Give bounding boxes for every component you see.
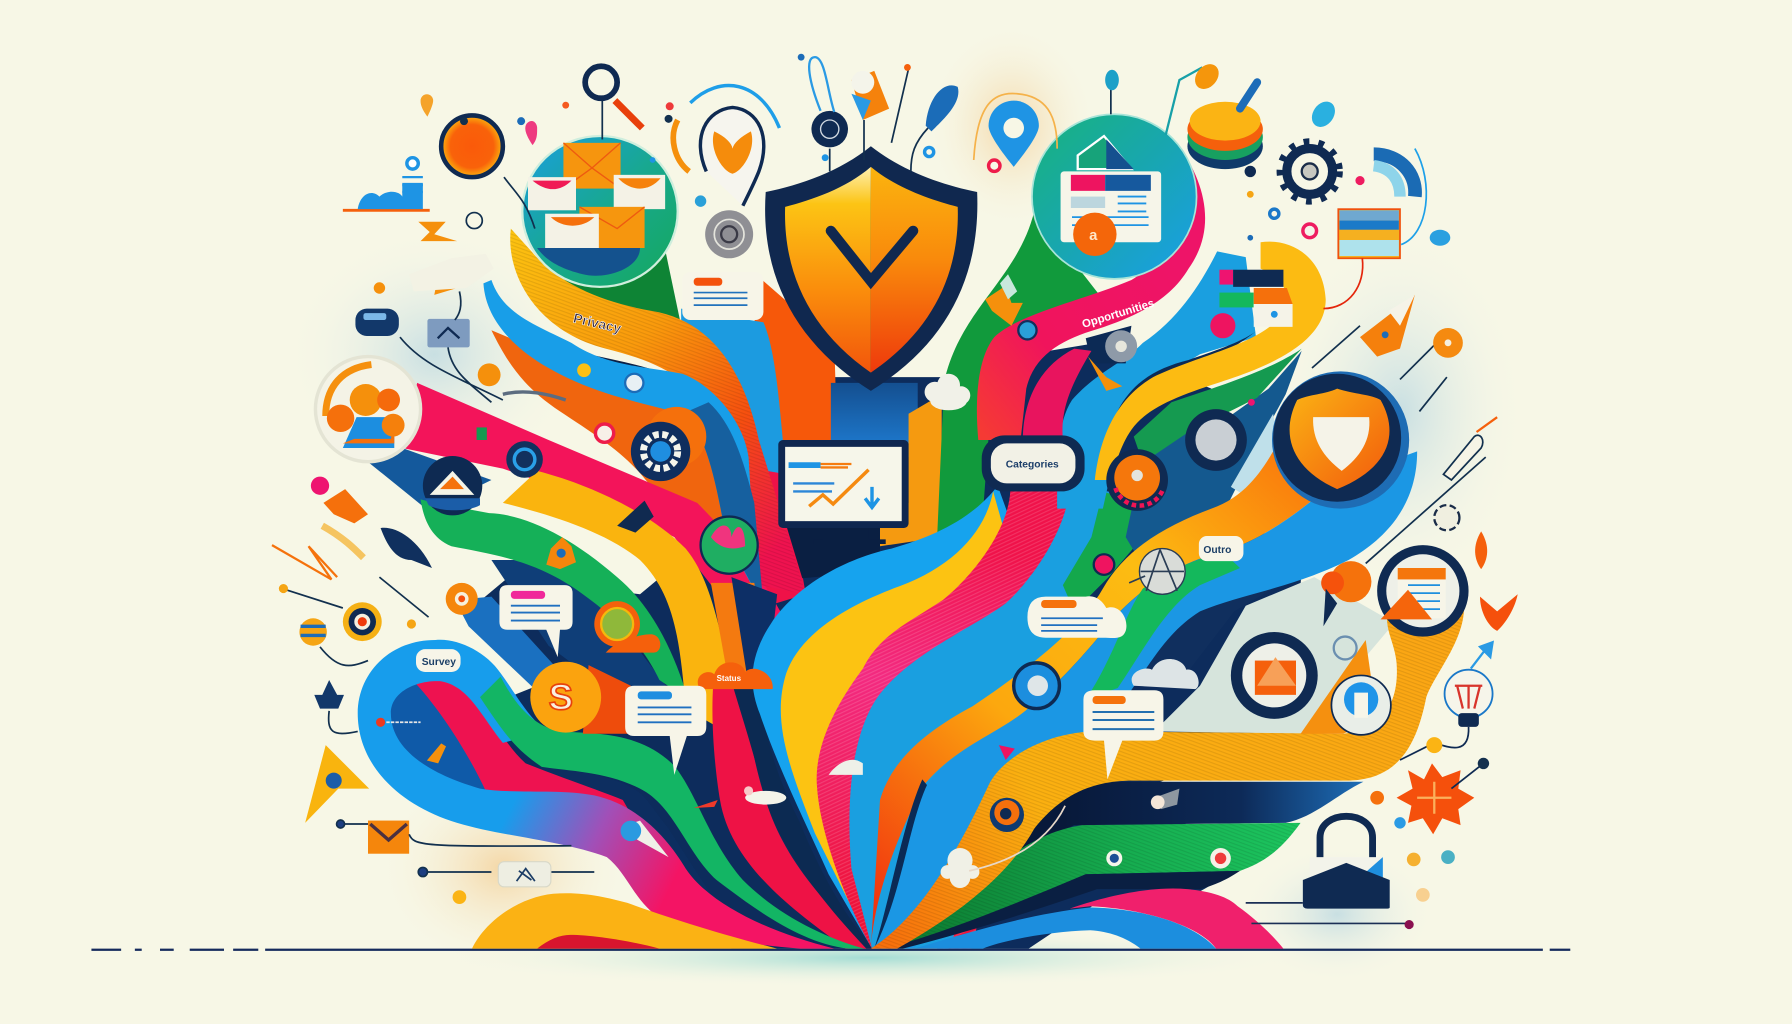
leaf icons right [1475, 531, 1518, 631]
small clouds centre [744, 760, 863, 805]
ribbon: bottom blue [914, 907, 1216, 949]
ribbon: blue column under shield [831, 383, 918, 457]
blue arc [690, 86, 779, 128]
dotted glows behind the ribbons [286, 23, 1526, 987]
chip card [1254, 288, 1293, 327]
ribbon: navy below green [886, 871, 1240, 949]
small green pink circle [701, 517, 758, 574]
badge: navy circle icon [423, 456, 482, 515]
ribbon: green band stripes [886, 823, 1301, 949]
icon pill bottom [498, 862, 551, 887]
ribbon: blue strip lower left [455, 597, 562, 691]
navy star [314, 680, 358, 734]
orange cloud with label [698, 662, 773, 689]
ring small right [1434, 505, 1459, 530]
ribbon: big yellow band [871, 606, 1464, 949]
ribbon: left green area behind circle [560, 211, 681, 371]
pill label: categories [982, 435, 1085, 491]
target on big yellow ribbon [990, 798, 1024, 832]
small red ring [989, 160, 1000, 171]
ribbon: navy column lower [731, 681, 874, 949]
ribbon: yellow band left [503, 471, 745, 743]
scattered confetti dots [374, 54, 1365, 406]
ribbon: green band right [1086, 552, 1240, 699]
envelope: white right [614, 175, 665, 209]
ribbon: orange stem under small circle [711, 583, 773, 697]
shield [765, 146, 977, 391]
line under padlock [1246, 903, 1414, 929]
blue map pin [989, 101, 1039, 167]
swirl icon [506, 441, 543, 478]
monitor [778, 440, 909, 544]
pill label: loop [416, 649, 461, 672]
ribbon: fan yellow [781, 491, 1029, 949]
diagonal speed lines [1312, 326, 1486, 563]
pill label: outro [1199, 536, 1243, 561]
orange round S seal [530, 662, 640, 734]
label: opportunities on ribbon: Opportunities [1081, 298, 1156, 331]
ribbon: dark blue inner [682, 402, 763, 606]
magnifier [585, 66, 642, 139]
ribbon: green band left [421, 499, 688, 699]
wire from card [1323, 258, 1363, 309]
gold dot bottom [453, 890, 466, 904]
ribbon: blue band [483, 280, 757, 594]
pins top right [1105, 59, 1340, 135]
bird navy [381, 528, 432, 568]
ribbon: fan blue [752, 486, 1029, 949]
striped ball [299, 618, 327, 646]
candy bow [1088, 357, 1122, 391]
navy capsule [355, 309, 399, 336]
small gear icon [1105, 330, 1137, 362]
ribbon: navy fan strip [874, 779, 939, 949]
small chart icon [343, 158, 430, 210]
wires left [400, 291, 503, 402]
spiral target [343, 602, 382, 641]
round lock on ribbon [1018, 321, 1037, 339]
speech bubble: top left [682, 272, 763, 320]
ribbon: inner loop crimson [411, 679, 646, 840]
shield: left face [785, 167, 871, 373]
sun cloud icon [594, 601, 660, 653]
document: roof dark [1106, 139, 1134, 169]
ribbon: fan blue second [849, 491, 1131, 949]
cable from figure [969, 806, 1065, 871]
lightbulb [1445, 670, 1493, 727]
ribbon: bottom left yellow [472, 893, 777, 949]
ring icon: orange tent [1231, 632, 1318, 719]
dots on blue ribbon [577, 363, 643, 392]
chevron tile [427, 319, 470, 347]
orange hook connector [478, 363, 566, 400]
ribbon: navy wedge left [369, 448, 491, 511]
ring icon: document with triangle [1377, 545, 1469, 637]
zig zag arrows [272, 526, 363, 579]
shield: check mark [831, 231, 913, 281]
grey spiral [705, 210, 753, 258]
ribbon: blue behind speech bubble [681, 309, 786, 474]
ribbon: big yellow stripes [871, 606, 1464, 949]
white circle with orange cloud [315, 357, 421, 462]
envelope: orange back [563, 143, 621, 189]
ribbon: bottom left crimson inset [537, 935, 659, 949]
ribbon: fan pink [817, 491, 1086, 949]
ribbon: green under yellow right [1134, 349, 1302, 463]
lock body [1303, 863, 1390, 909]
envelope: white front [545, 214, 599, 248]
envelope: orange front [579, 207, 645, 248]
ribbon: green main band [480, 677, 864, 949]
orange gear circle [1106, 449, 1168, 511]
ribbon: crimson column lower [712, 686, 872, 949]
connector lines bottom left [337, 820, 594, 877]
speech bubble: center left [625, 686, 706, 775]
orange cloud with label: Status [717, 674, 742, 683]
orange ring on ribbon [446, 583, 478, 615]
silver coin [1185, 409, 1247, 471]
small ring blue [925, 147, 934, 157]
dot on green right [1210, 848, 1231, 869]
pin on pink [477, 427, 487, 440]
badge: white inner shield [1313, 417, 1369, 471]
rocket [1360, 295, 1415, 357]
ribbon: dark backing mass [474, 343, 1303, 949]
ribbon: orange wave [871, 451, 1337, 949]
pill label: categories: Categories [1006, 459, 1059, 470]
arrow above lightbulb [1471, 642, 1493, 669]
orange flame left with red ball [311, 477, 368, 523]
small dots lower right [1370, 737, 1489, 902]
speech bubble: center right [1027, 596, 1126, 638]
polygon sphere [1129, 549, 1185, 594]
ribbon: navy base behind monitor [779, 503, 880, 578]
stick pins above shield [830, 64, 911, 171]
ribbon: yellow band right [1095, 242, 1326, 480]
circle panel: envelopes [522, 136, 678, 287]
ribbon: privacy band [510, 229, 806, 594]
padlock [1303, 816, 1390, 909]
ribbon: navy panel [1143, 558, 1326, 686]
circle panel: document [1032, 114, 1197, 279]
monitor: screen [785, 447, 902, 521]
framed stripes card [1338, 209, 1400, 258]
ribbon: crimson column under monitor [731, 440, 806, 606]
ribbon: navy band below big yellow [1017, 782, 1363, 851]
navy spiral button [811, 111, 848, 147]
ribbon: blue wave [874, 451, 1417, 949]
lightning icons [418, 222, 457, 295]
ribbon: navy stem [731, 577, 777, 686]
orange blob [1321, 561, 1371, 626]
ribbon: orange wedge near bulb badge [1301, 640, 1377, 734]
red dot on ribbon [1094, 554, 1114, 575]
swirl on panel [1334, 637, 1357, 659]
cloud grey [1132, 659, 1199, 689]
pink drop [525, 121, 537, 145]
rainbow arc [1374, 154, 1415, 197]
ribbon: right green area [937, 211, 1103, 537]
gem pin [851, 71, 889, 120]
badge: large shield [1272, 371, 1409, 509]
small red wedge [694, 800, 718, 808]
monitor: chart [789, 464, 879, 507]
speech bubble: left [499, 585, 573, 657]
label: privacy: Privacy [572, 311, 623, 336]
ribbon: pale grey panel [1154, 577, 1394, 734]
monitor: stand [814, 528, 886, 544]
ribbon: orange block behind shield [754, 280, 840, 537]
ribbon: navy under green loop [514, 767, 800, 949]
arc [326, 365, 371, 416]
bulb with orange butterfly [700, 107, 764, 206]
envelope: dark shadow [537, 248, 640, 276]
ribbon: fan pink stripes [817, 491, 1086, 949]
pen on navy band [1151, 789, 1179, 809]
ribbon: navy shadow under privacy band [589, 354, 749, 514]
paper clip top [809, 57, 834, 112]
ribbon: green wedge [1063, 491, 1143, 611]
capsule and arrow [1443, 417, 1497, 480]
orange round S seal: S [549, 677, 573, 718]
yellow triangle arrow [305, 745, 369, 823]
document: orange seal [1073, 213, 1117, 256]
glass orb [1014, 663, 1059, 709]
ribbon: bottom pink [1070, 889, 1283, 949]
ribbon: blue loop into pink [358, 640, 834, 949]
paperclip icon [617, 501, 654, 533]
small clock circle [466, 213, 482, 229]
ribbon: pink diagonal [402, 383, 786, 623]
stacked disc [1187, 102, 1263, 169]
ribbon: navy wedge under red [1086, 326, 1131, 363]
cloud icon [327, 384, 405, 448]
document: card [1061, 171, 1161, 242]
orange dot on stick [1433, 328, 1463, 358]
target dot on orange [595, 424, 614, 442]
ribbon: inner loop blue [384, 674, 503, 800]
blue teardrop stick [911, 85, 958, 171]
flag ribbon [409, 254, 494, 291]
wires near target [279, 577, 429, 665]
orange arc near bulb [673, 120, 689, 171]
lightbulb tile [1331, 675, 1391, 735]
ribbon: lower orange left [491, 330, 743, 549]
gear icon [631, 407, 706, 481]
orange splat [1397, 763, 1474, 834]
ribbon: second pink [1023, 349, 1091, 440]
flags and chips right [1219, 270, 1293, 327]
ribbon: right blue strip [1057, 251, 1256, 509]
gold loop around pin [974, 93, 1057, 160]
marks on loop [376, 718, 443, 760]
page [1398, 568, 1446, 618]
gear dark [1280, 142, 1339, 201]
pink shard on blue [999, 745, 1015, 760]
flower icon on green ribbon [546, 537, 576, 569]
ribbon: orange block right of monitor [880, 394, 942, 546]
triangle [1381, 590, 1432, 619]
ribbon: teal blue block right [1126, 351, 1302, 566]
ribbon: red band upper right [977, 143, 1205, 440]
ring orange ball [441, 115, 535, 229]
speech bubble: bottom right [1083, 690, 1163, 779]
pill label: loop: Survey [422, 657, 456, 668]
document: orange seal: a [1089, 228, 1098, 244]
ribbon: pale blue triangle [1231, 414, 1280, 496]
document: roof [1078, 136, 1131, 169]
pill label: outro: Outro [1203, 545, 1231, 556]
wire from bulb [1400, 727, 1483, 789]
white figure [941, 848, 979, 888]
heart tulip [985, 274, 1023, 326]
ribbon: navy wedge under green [491, 560, 674, 697]
dots on green [1106, 850, 1122, 866]
ribbon: navy sliver right [1103, 331, 1256, 457]
pin on pink loop [621, 821, 669, 857]
orange pin top left [421, 94, 433, 117]
pink dot on blue [1210, 313, 1235, 338]
cloud near monitor [925, 374, 970, 410]
shield: right face [871, 167, 958, 373]
envelope: white left [528, 177, 576, 210]
bottom baseline [91, 949, 1570, 951]
envelope orange bottom left [368, 821, 409, 854]
wire to blue drop [1401, 149, 1450, 246]
ribbon: green band bottom [886, 823, 1301, 949]
